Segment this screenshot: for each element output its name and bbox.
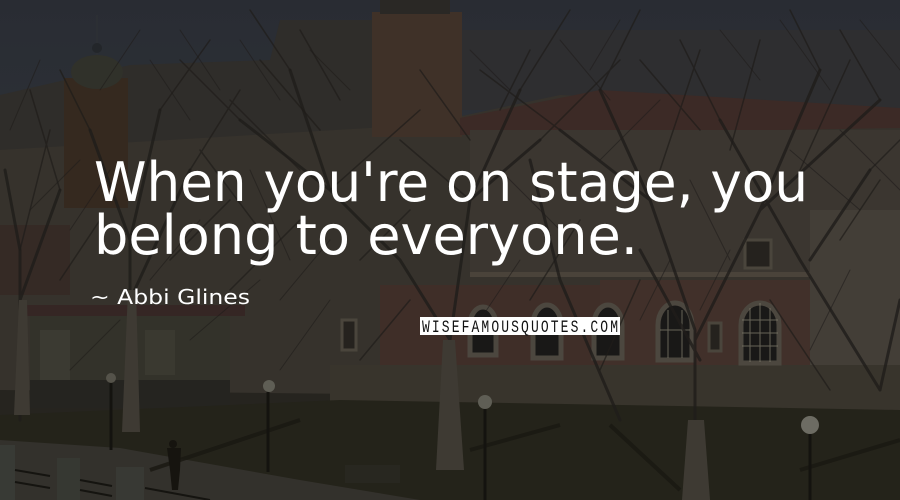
sky [0, 0, 900, 130]
centre tower [372, 12, 462, 137]
window glazing bars [660, 303, 778, 362]
lamp posts [106, 373, 819, 500]
building facade [0, 95, 900, 400]
author attribution: ~ Abbi Glines [90, 285, 250, 309]
left tower [64, 15, 128, 208]
small windows [342, 240, 771, 351]
quote text [94, 151, 808, 267]
cornice [470, 272, 900, 277]
pedestrian [167, 440, 181, 490]
upper storey [470, 130, 900, 272]
quote text: When you're on stage, you [94, 151, 808, 214]
arched windows [470, 303, 779, 363]
brick band [600, 280, 810, 365]
left pavilion [20, 305, 245, 380]
quote text: belong to everyone. [94, 204, 638, 267]
watermark badge: WISEFAMOUSQUOTES.COM [422, 317, 618, 338]
pale stone wing [810, 210, 900, 400]
plinth [330, 365, 900, 410]
red roof [460, 90, 900, 135]
bollards and bench [0, 445, 400, 500]
tree trunks [14, 290, 710, 500]
tree canopy haze [0, 20, 372, 200]
branch shadows on lawn [150, 420, 900, 490]
path [0, 440, 420, 500]
lawn [0, 400, 900, 500]
hedge [30, 380, 230, 408]
